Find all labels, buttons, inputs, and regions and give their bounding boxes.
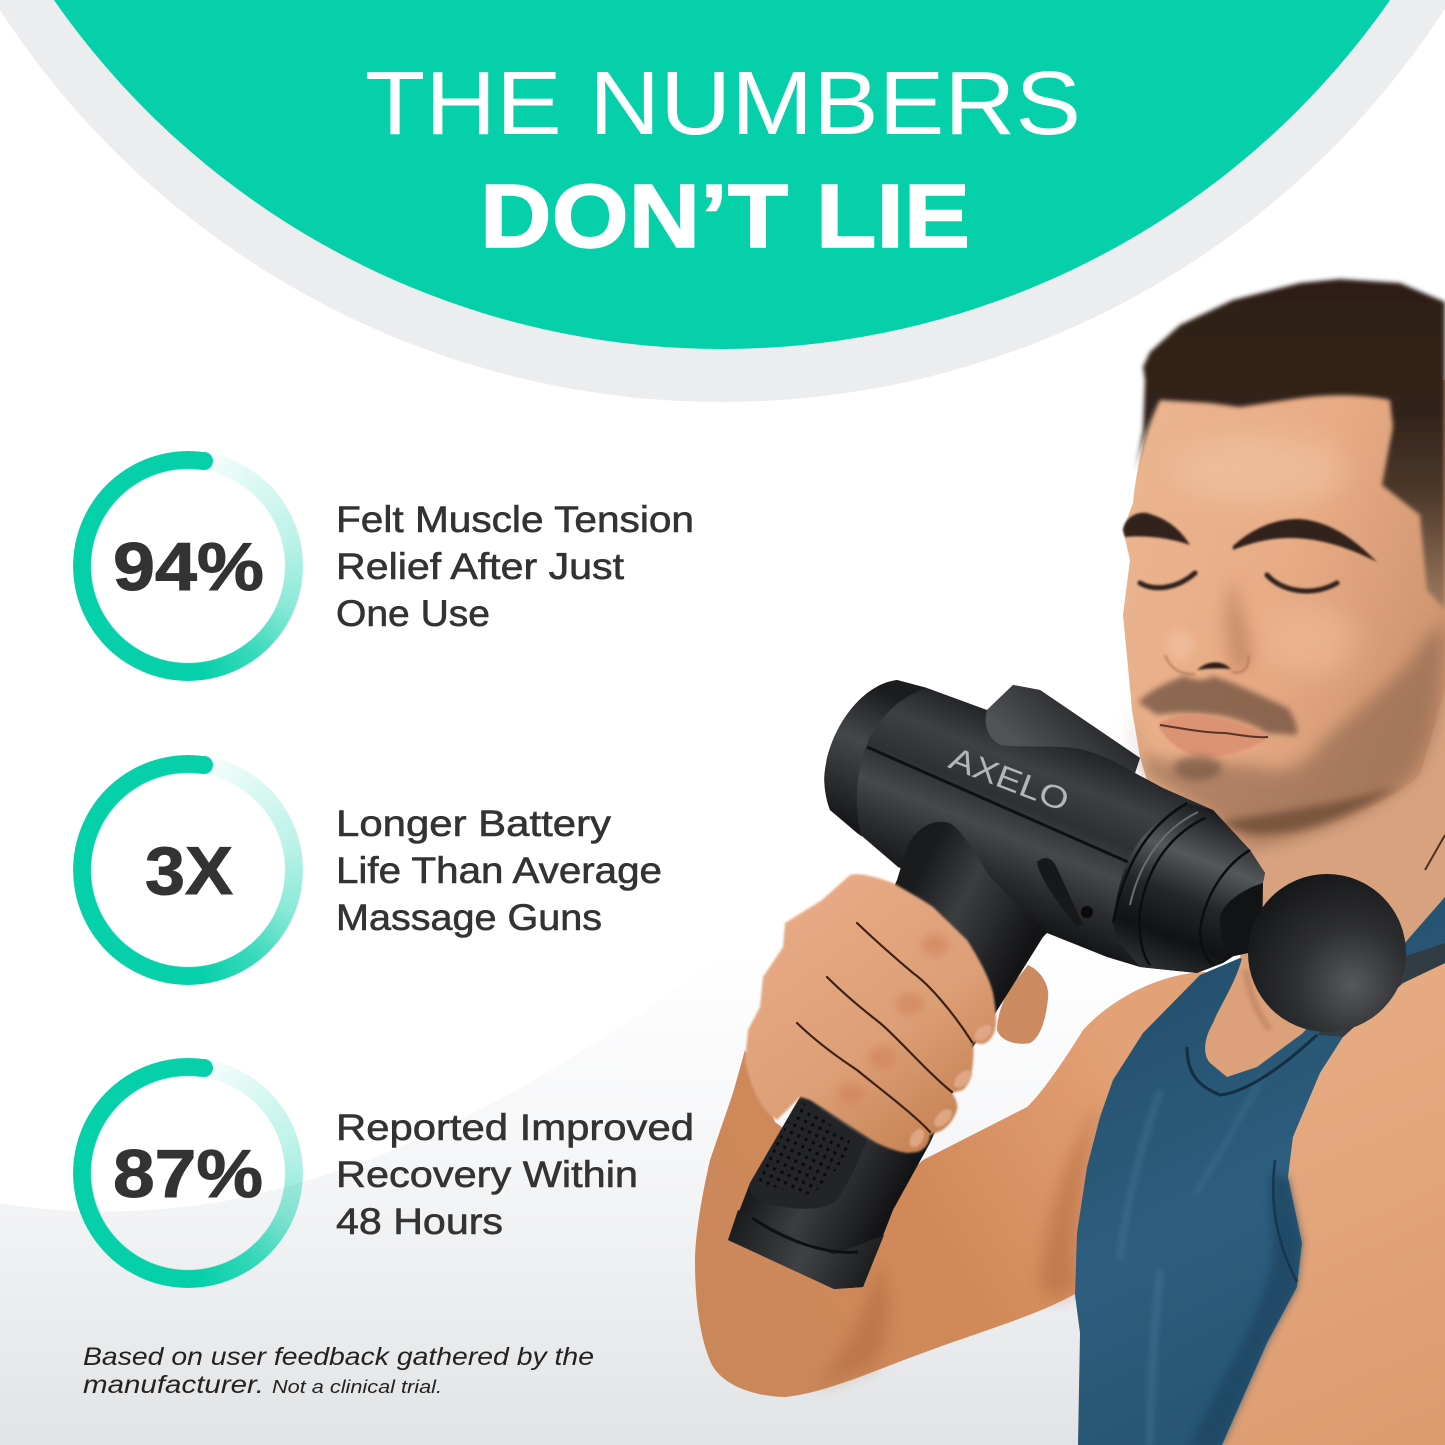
ring cap [195,756,213,774]
stat: 3X [73,755,662,985]
title: DON’T LIE [480,167,970,267]
mouth line [1160,725,1268,737]
textured grip panel [750,1097,867,1209]
shirt dark side [1190,1175,1302,1445]
footnote: manufacturer. [83,1371,264,1399]
value and description: 48 Hours [336,1201,503,1242]
header teal arc [0,0,1445,349]
shirt neck skin [1205,950,1330,1077]
value and description: Felt Muscle Tension [336,499,694,540]
value and description: Reported Improved [336,1107,694,1148]
armpit shadow [1039,1100,1100,1298]
shirt fold highlights [1120,1075,1263,1445]
moustache [1138,676,1297,735]
value and description [113,499,694,634]
title: THE NUMBERS [365,54,1081,154]
footnote [83,1343,594,1399]
value and description [145,803,662,938]
goatee [1174,756,1222,780]
nose shadow [1225,575,1251,672]
front section [1113,803,1265,973]
rear cap [824,680,927,836]
stat: 87% [73,1058,694,1288]
port [1081,906,1093,918]
value and description: Relief After Just [336,546,625,587]
value and description: Recovery Within [336,1154,638,1195]
body ridge [867,747,1128,862]
man's head and neck [1123,279,1445,1040]
finger creases [797,923,972,1132]
forearm and upper arm [695,972,1240,1397]
lips [1158,714,1270,757]
value and description: 94% [113,529,264,605]
grip base [728,1210,884,1289]
ring cap [195,1059,213,1077]
nose tip [1166,629,1194,661]
progress ring [73,755,303,985]
cheek highlight [1265,605,1355,675]
ring cap [195,452,213,470]
nostril [1197,662,1231,670]
shaft [1220,883,1263,957]
right eyebrow [1233,519,1377,562]
thumb [997,965,1048,1044]
value and description: One Use [336,593,490,634]
header outer arc [0,0,1445,402]
jaw shadow [1220,785,1400,834]
body ring highlight [1130,812,1198,905]
footnote: Not a clinical trial. [272,1377,442,1397]
collar seam [1187,1035,1317,1095]
mode button [986,685,1140,773]
vent slot [1037,858,1083,925]
neck inner shadow [1246,970,1270,1030]
knuckles [838,934,949,1104]
progress ring [73,1058,303,1288]
base seam [752,1218,858,1252]
value and description: Longer Battery [336,803,612,844]
logo: AXELO [944,740,1074,818]
closed eyes [1140,573,1337,591]
neck tone [1247,690,1445,960]
handle [728,822,1047,1289]
gun body [824,680,1265,973]
beard stubble [1132,620,1445,848]
hand and fingers [745,874,996,1153]
forehead highlight [1175,435,1345,505]
footnote: Based on user feedback gathered by the [83,1343,594,1371]
stat: 94% [73,451,694,681]
hair [1135,279,1445,610]
fingernails [907,1022,995,1150]
nose outline [1165,655,1248,674]
shoulder strap [1317,943,1445,1037]
shoulder [1222,960,1445,1445]
elbow crease shadow [815,1260,889,1388]
collar rings [1113,803,1250,965]
massage gun [728,680,1406,1289]
title [365,54,1081,267]
value and description: Life Than Average [336,850,662,891]
tank top [1075,897,1445,1445]
neck crease [1425,835,1445,870]
left eyebrow [1123,513,1190,545]
value and description: 3X [145,833,233,909]
value and description: 87% [113,1136,263,1212]
massage ball [1248,874,1406,1032]
progress ring [73,451,303,681]
value and description: Massage Guns [336,897,602,938]
armhole seam [1273,1160,1297,1282]
value and description [113,1107,694,1242]
